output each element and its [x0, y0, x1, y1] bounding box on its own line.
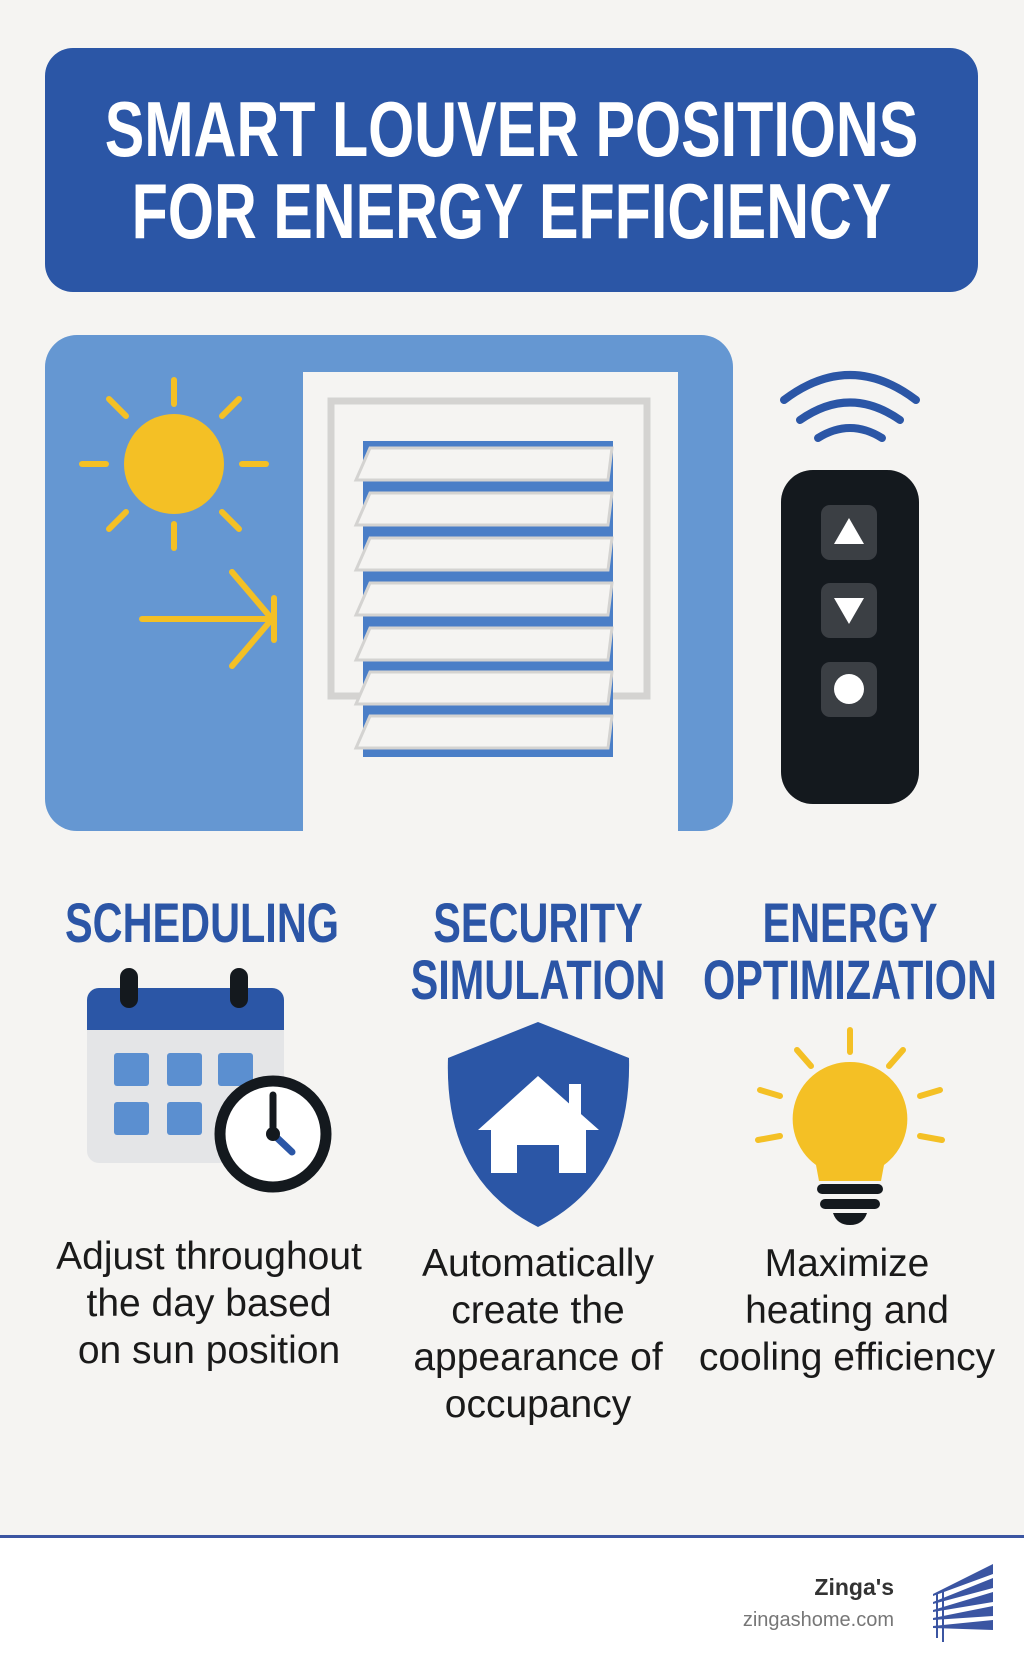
heading: security simulation: SIMULATION: [411, 948, 665, 1011]
icons row: [87, 968, 945, 1227]
heading: energy optimization: [703, 891, 997, 1011]
heading: energy optimization: OPTIMIZATION: [703, 948, 997, 1011]
text: security: appearance of: [413, 1336, 663, 1379]
text: scheduling: [56, 1235, 362, 1372]
title banner: [45, 48, 978, 292]
footer brand text: Zinga's: [814, 1574, 894, 1600]
text: security: [413, 1242, 663, 1426]
title text: FOR ENERGY EFFICIENCY: [132, 167, 891, 255]
text: energy: heating and: [745, 1289, 949, 1332]
text: security: create the: [451, 1289, 625, 1332]
icon: sun: [82, 380, 266, 548]
icon: wifi: [784, 375, 916, 438]
louver slats: [356, 441, 613, 757]
icon: remote control: [781, 470, 919, 804]
icon: shield with house: [448, 1022, 629, 1227]
footer brand text: [743, 1574, 894, 1631]
text: energy: Maximize: [765, 1242, 929, 1285]
text: scheduling: the day based: [86, 1282, 332, 1325]
title text: [105, 85, 918, 255]
footer: [0, 1535, 1024, 1669]
text: energy: [699, 1242, 995, 1379]
footer brand text: zingashome.com: [743, 1609, 894, 1631]
logo: blinds: [933, 1564, 993, 1642]
heading: energy optimization: ENERGY: [762, 891, 938, 954]
heading: security simulation: SECURITY: [433, 891, 643, 954]
heading: scheduling: SCHEDULING: [65, 891, 339, 954]
heading: security simulation: [411, 891, 665, 1011]
icon: light bulb: [758, 1030, 942, 1225]
icon: calendar with clock: [87, 968, 326, 1187]
title text: SMART LOUVER POSITIONS: [105, 85, 918, 173]
arrow: sunlight: [142, 572, 274, 666]
text: scheduling: Adjust throughout: [56, 1235, 362, 1278]
illustration: window with louvers and sun: [45, 335, 920, 831]
text: security: Automatically: [422, 1242, 654, 1285]
text: scheduling: on sun position: [78, 1329, 340, 1372]
text: security: occupancy: [445, 1383, 631, 1426]
text: energy: cooling efficiency: [699, 1336, 995, 1379]
